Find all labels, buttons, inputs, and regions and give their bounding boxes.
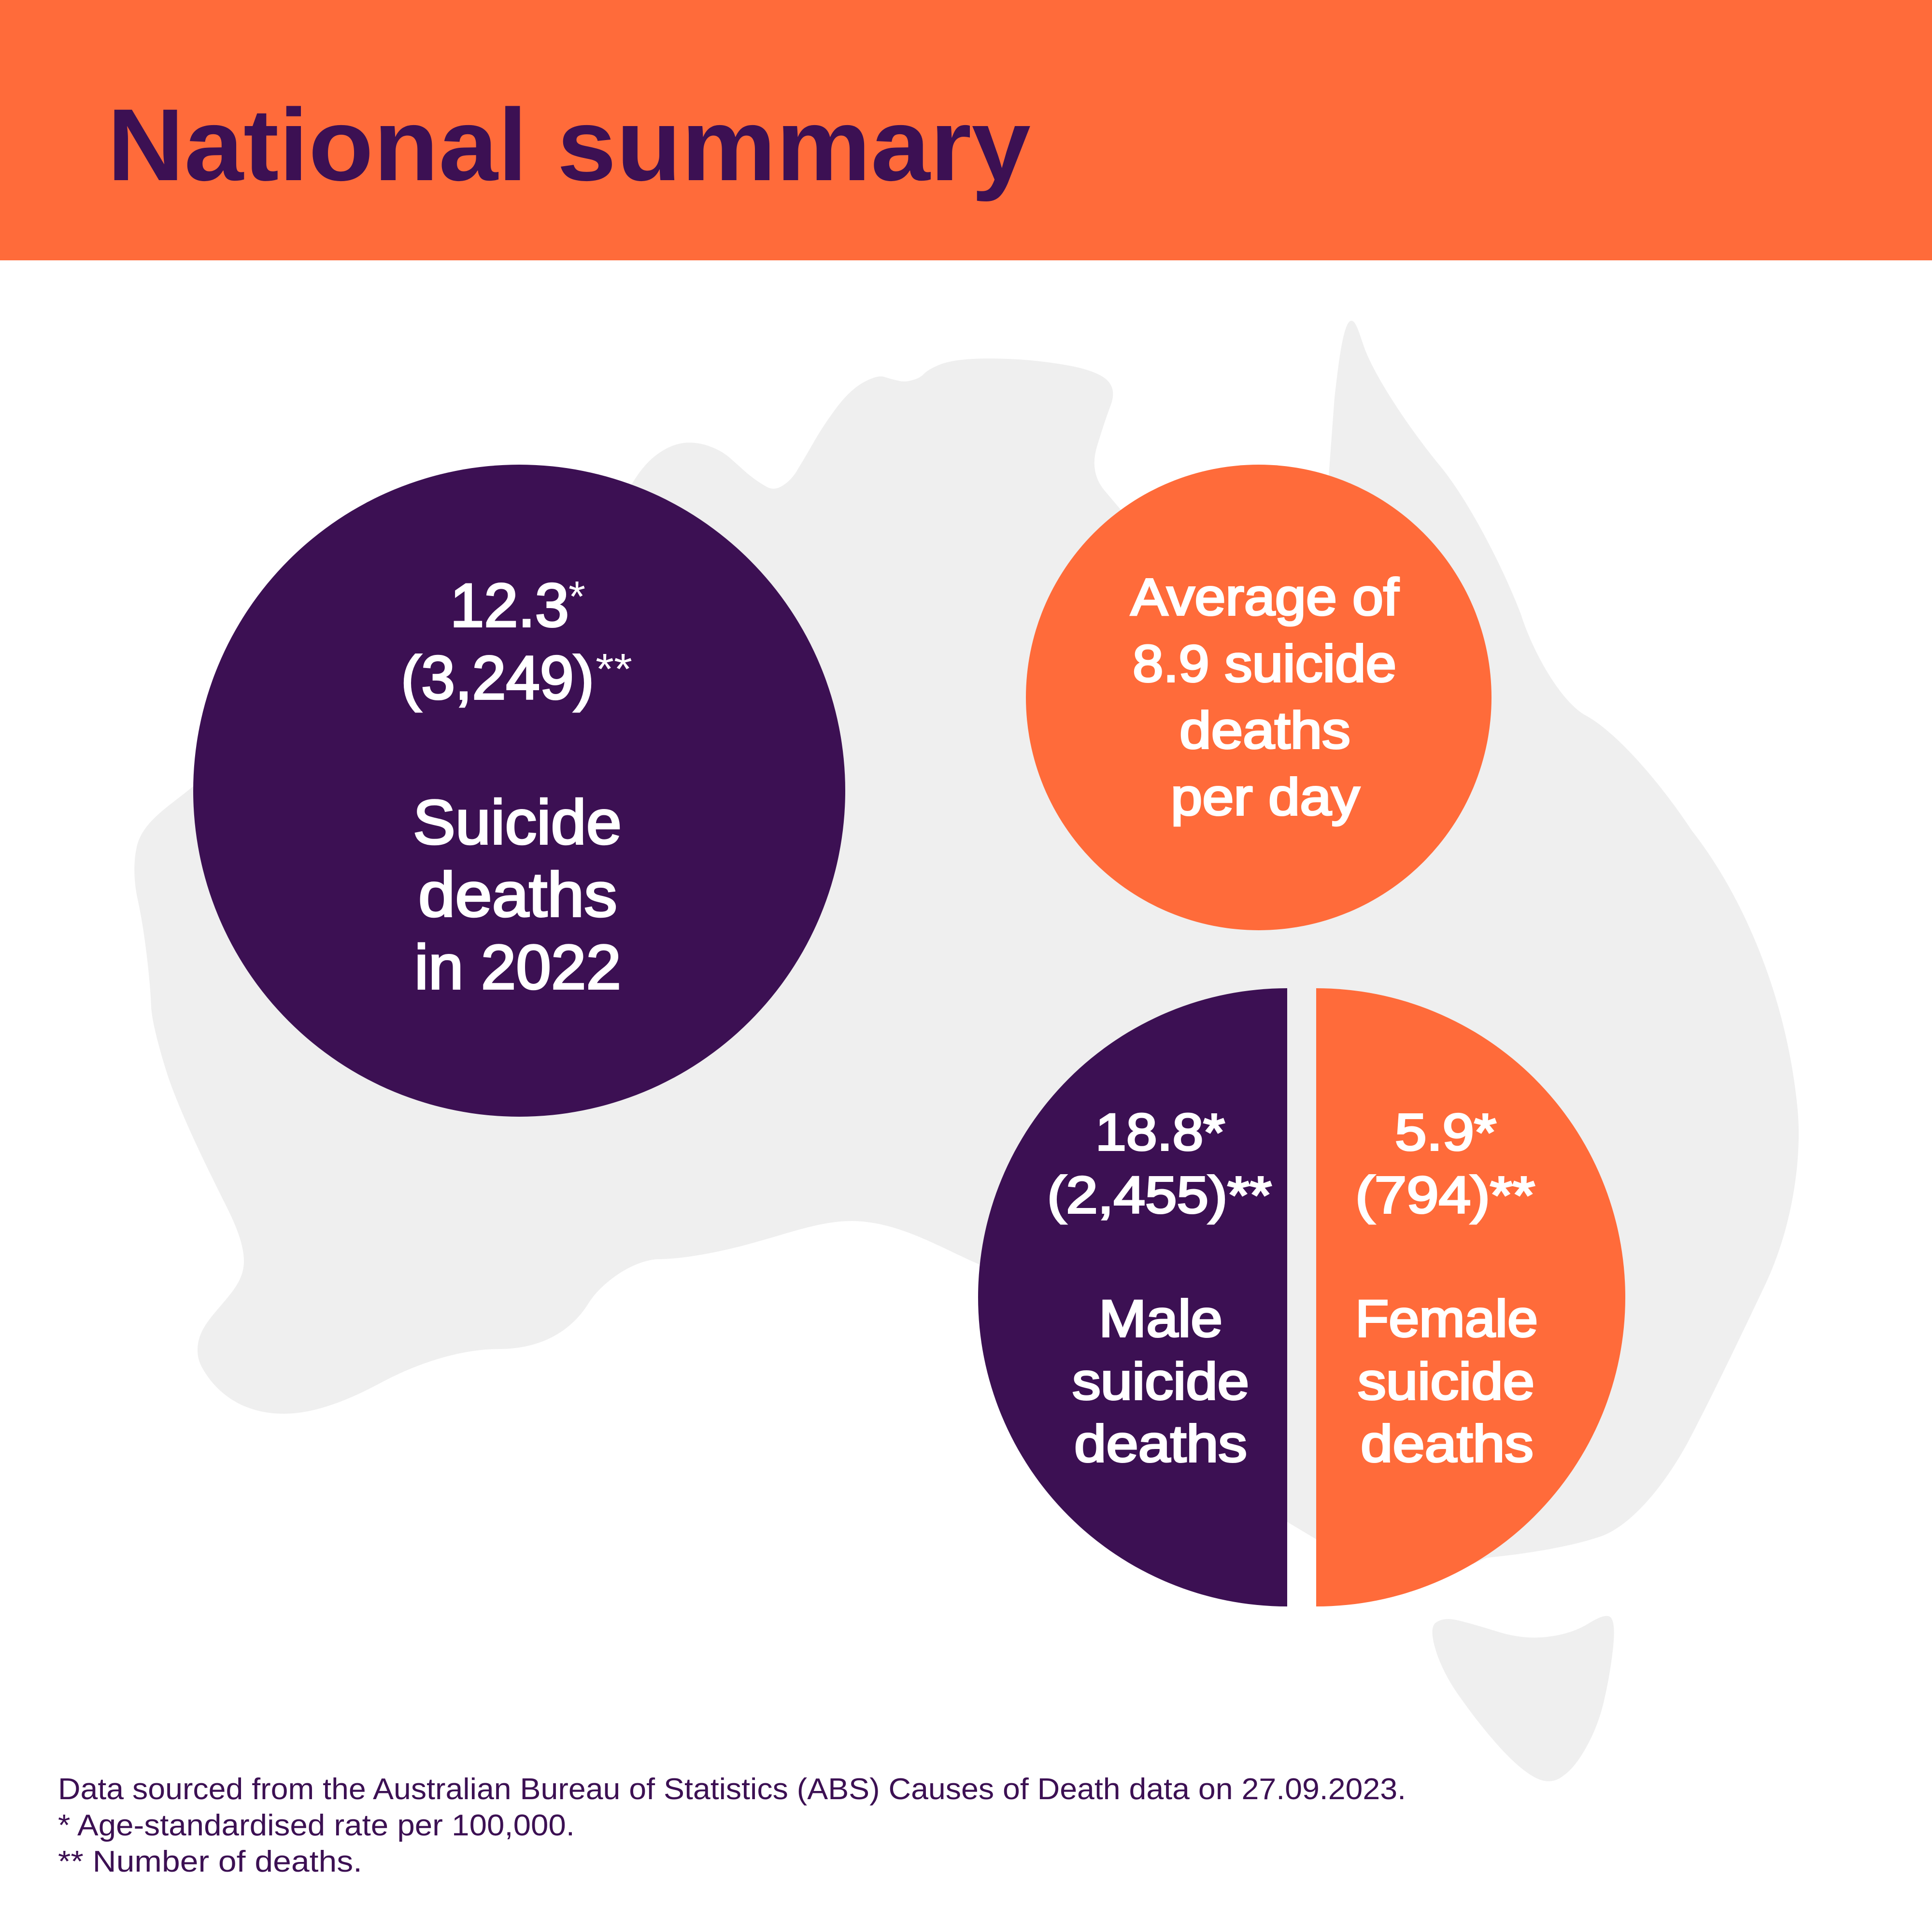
title: National summary: [107, 87, 1031, 202]
average text: deaths: [1179, 701, 1350, 759]
rate and count: 12.3: [450, 571, 569, 639]
map of Australia: [134, 321, 1799, 1781]
female text: suicide: [1358, 1352, 1534, 1410]
footnotes: Data sourced from the Australian Bureau of Statistics (ABS) Causes of Death data on 27.09.2023.: [58, 1773, 1406, 1806]
footnotes: * Age-standardised rate per 100,000.: [58, 1809, 575, 1842]
average text: Average of: [1131, 568, 1399, 626]
female text: Female: [1355, 1289, 1538, 1348]
panel: male semicircle: [978, 988, 1287, 1606]
male text: Male: [1099, 1289, 1222, 1348]
panel: average per day circle: [1026, 465, 1492, 930]
average text: [1131, 568, 1399, 826]
male text: 18.8*: [1095, 1103, 1225, 1161]
male text: [1047, 1103, 1272, 1473]
footnotes: [58, 1773, 1406, 1878]
average text: 8.9 suicide: [1133, 634, 1396, 693]
label: in 2022: [414, 932, 621, 1002]
mainland: [134, 321, 1799, 1594]
rate and count: **: [596, 645, 632, 694]
female text: [1355, 1103, 1538, 1473]
footnotes: ** Number of deaths.: [58, 1845, 362, 1878]
female text: (794)**: [1355, 1165, 1535, 1224]
female text: 5.9*: [1395, 1103, 1496, 1161]
label: Suicide: [413, 787, 622, 857]
label: [413, 787, 622, 1002]
average text: per day: [1171, 767, 1360, 826]
male text: suicide: [1072, 1352, 1249, 1410]
rate and count: (3,249): [401, 643, 594, 712]
label: deaths: [418, 859, 617, 930]
male text: deaths: [1074, 1414, 1247, 1473]
Tasmania: [1432, 1616, 1614, 1781]
rate and count: [401, 571, 632, 712]
rate and count: *: [568, 573, 585, 621]
male text: (2,455)**: [1047, 1165, 1272, 1224]
header banner: [0, 0, 1932, 260]
female text: deaths: [1361, 1414, 1534, 1473]
panel: female semicircle: [1316, 988, 1625, 1606]
panel: total suicide deaths circle: [193, 465, 845, 1117]
